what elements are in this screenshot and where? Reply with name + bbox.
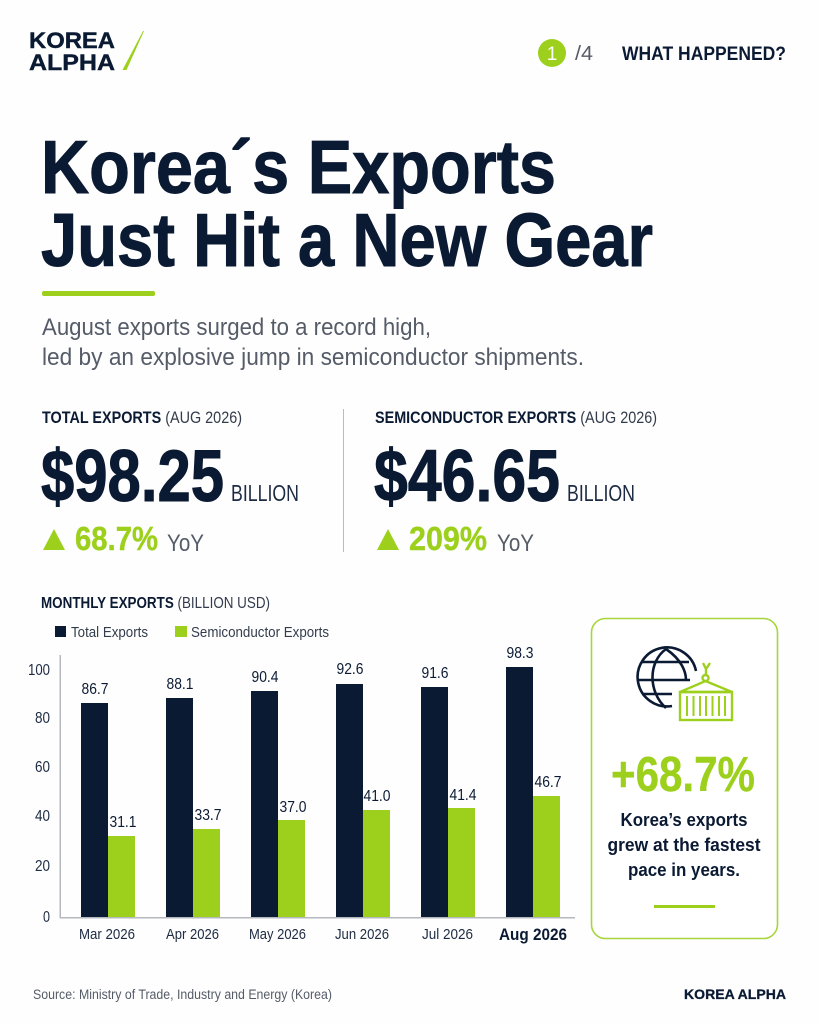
bar chart: Jun 2026 <box>335 926 389 943</box>
page indicator: /4 <box>575 43 593 65</box>
bar chart: 60 <box>35 759 50 776</box>
callout text: grew at the fastest <box>608 834 760 855</box>
panel: semiconductor exports <box>374 408 657 557</box>
callout text <box>608 809 760 880</box>
callout text: pace in years. <box>628 859 740 880</box>
source: Source: Ministry of Trade, Industry and Energy (Korea) <box>33 987 332 1002</box>
title <box>41 125 653 282</box>
panel: total exports: 68.7% <box>75 520 158 557</box>
chart legend: Total Exports <box>71 624 148 641</box>
bar chart: 98.3 <box>506 645 534 662</box>
bar chart: 88.1 <box>166 676 194 693</box>
panel: total exports: $98.25 <box>41 436 224 517</box>
panel: total exports: TOTAL EXPORTS (AUG 2026) <box>42 408 242 427</box>
subtitle: led by an explosive jump in semiconductor shipments. <box>42 344 584 371</box>
bar chart: 20 <box>35 858 50 875</box>
bar chart <box>28 645 575 944</box>
section label: WHAT HAPPENED? <box>622 44 786 65</box>
logo: Korea Alpha: ALPHA <box>29 50 115 75</box>
logo: Korea Alpha <box>29 28 144 75</box>
panel: total exports <box>41 408 299 557</box>
panel: total exports: BILLION <box>231 480 299 506</box>
bar chart: 31.1 <box>110 814 137 831</box>
bar chart: 37.0 <box>280 799 307 816</box>
bar chart: 91.6 <box>422 665 449 682</box>
panel: total exports: YoY <box>167 530 204 557</box>
panel: semiconductor exports: YoY <box>497 530 534 557</box>
bar chart: 46.7 <box>534 774 562 791</box>
panel: callout <box>592 618 778 938</box>
logo: Korea Alpha: KOREA <box>29 28 115 53</box>
callout figure: +68.7% <box>611 748 755 802</box>
footer brand: KOREA ALPHA <box>684 987 786 1002</box>
title: Just Hit a New Gear <box>41 198 653 282</box>
bar chart: 90.4 <box>252 669 279 686</box>
chart legend <box>55 624 329 641</box>
bar chart: Aug 2026 <box>499 925 567 944</box>
bar chart: 80 <box>35 710 50 727</box>
panel: semiconductor exports: SEMICONDUCTOR EXPORTS (AUG 2026) <box>375 408 657 427</box>
icon: globe and container <box>637 647 732 720</box>
bar chart: 100 <box>28 662 50 679</box>
title: Korea´s Exports <box>41 125 556 209</box>
panel: semiconductor exports: BILLION <box>567 480 635 506</box>
page indicator: 1 <box>547 44 557 65</box>
bar chart: Mar 2026 <box>79 926 135 943</box>
subtitle: August exports surged to a record high, <box>42 314 431 341</box>
title underline <box>42 291 155 296</box>
panel: semiconductor exports: $46.65 <box>374 436 560 517</box>
callout text: Korea’s exports <box>620 809 748 830</box>
bar chart: 40 <box>35 808 50 825</box>
divider <box>343 409 344 552</box>
chart legend: Semiconductor Exports <box>191 624 329 641</box>
bar chart: 41.0 <box>364 788 391 805</box>
page indicator <box>538 39 593 67</box>
bar chart: 0 <box>43 909 50 926</box>
subtitle <box>42 314 584 371</box>
bar chart: 86.7 <box>82 681 109 698</box>
chart heading: MONTHLY EXPORTS (BILLION USD) <box>41 595 270 612</box>
bar chart: May 2026 <box>249 926 306 943</box>
bar chart: 41.4 <box>450 787 477 804</box>
bar chart: Jul 2026 <box>422 926 473 943</box>
panel: semiconductor exports: 209% <box>409 520 487 557</box>
bar chart: 92.6 <box>336 661 364 678</box>
bar chart: 33.7 <box>194 807 222 824</box>
bar chart: Apr 2026 <box>166 926 219 943</box>
